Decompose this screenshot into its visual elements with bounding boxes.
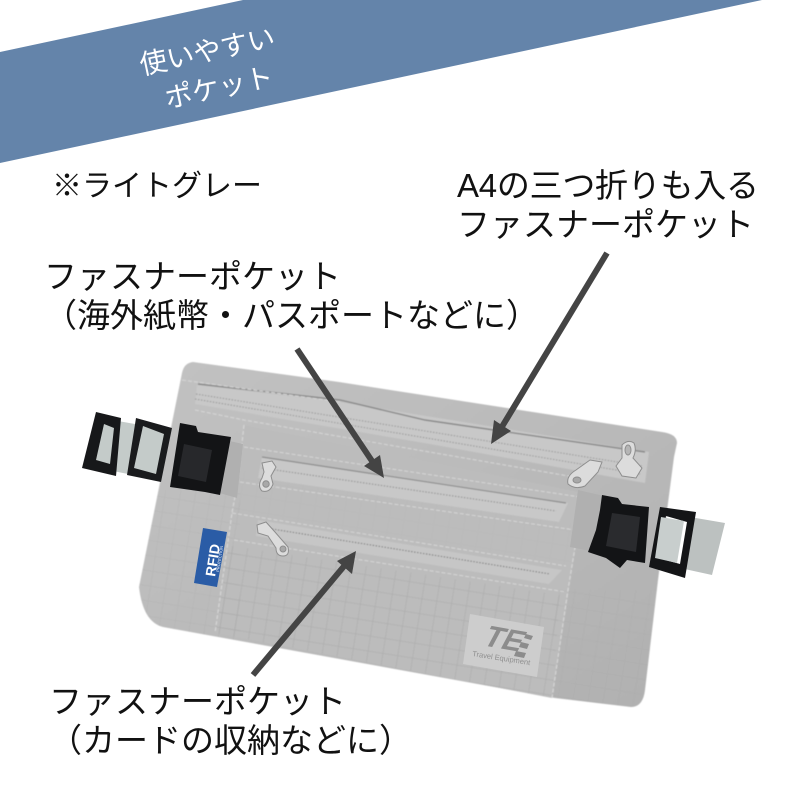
arrow: to A4 pocket: [491, 253, 607, 444]
callout: card pocket text: （カードの収納などに）: [49, 722, 412, 759]
arrow: to card pocket: [253, 551, 356, 675]
zipper pulls: [257, 441, 642, 556]
brand patch: Travel Equipment: [472, 649, 532, 667]
banner heading: 使いやすい: [137, 22, 278, 81]
lower zipper: [232, 513, 566, 592]
callout: card pocket text: ファスナーポケット: [49, 683, 346, 720]
brand patch: [463, 614, 544, 677]
RFID tag: PROTECTION: [215, 545, 224, 572]
banner heading: [137, 22, 286, 118]
ripstop grid: [219, 552, 558, 694]
callout: card pocket text: [49, 683, 412, 759]
callout: banknote pocket text: （海外紙幣・パスポートなどに）: [44, 297, 539, 334]
pouch body: [130, 362, 677, 707]
top zipper: [182, 380, 649, 483]
middle zipper: [240, 447, 580, 530]
banner heading: ポケット: [162, 61, 276, 114]
brand patch: TE: [478, 620, 532, 658]
right strap and buckle: [570, 490, 725, 578]
callout: A4 pocket text: A4の三つ折りも入る: [457, 167, 759, 204]
callout: A4 pocket text: ファスナーポケット: [457, 206, 754, 243]
front panel: [215, 425, 584, 698]
callout: A4 pocket text: [457, 167, 759, 243]
RFID tag: RFID: [202, 543, 223, 577]
banner: [0, 0, 762, 163]
RFID tag: [194, 528, 227, 587]
colour note: ※ライトグレー: [52, 170, 262, 203]
callout: banknote pocket text: ファスナーポケット: [44, 258, 341, 295]
arrow: to banknote pocket: [297, 349, 384, 478]
callout: banknote pocket text: [44, 258, 539, 334]
panel stitching: [215, 425, 584, 698]
product photo: waist pouch: [82, 362, 725, 707]
left strap and buckle: [82, 412, 243, 498]
